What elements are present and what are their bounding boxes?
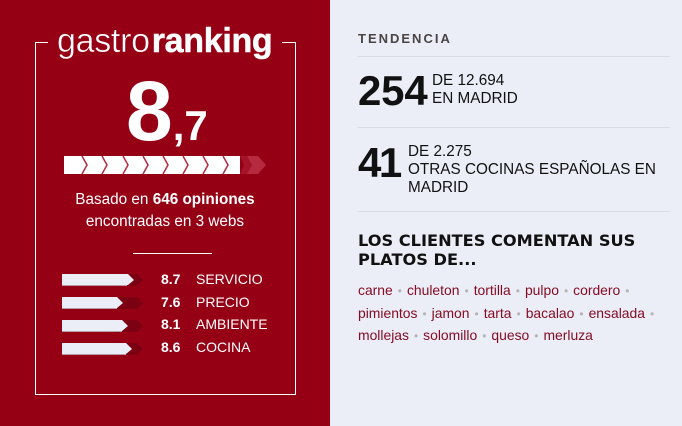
score chevron bar	[64, 156, 266, 174]
dish list	[358, 282, 654, 343]
score row: precio	[62, 294, 250, 310]
bar: precio	[62, 297, 143, 309]
value: servicio: 8.7	[161, 271, 180, 287]
number: 41: 41	[358, 139, 400, 186]
label: precio: PRECIO	[196, 294, 250, 310]
heading: customer comments	[358, 231, 635, 269]
reviews summary: Basado en 646 opiniones	[75, 191, 255, 208]
heading: tendencia: TENDENCIA	[358, 31, 452, 46]
label: cocina: COCINA	[196, 339, 250, 355]
bar: cocina	[62, 343, 143, 355]
bar: servicio	[62, 274, 143, 286]
label: servicio: SERVICIO	[196, 271, 263, 287]
text: spanish cuisine rank	[408, 143, 656, 196]
panel: rating	[0, 0, 330, 426]
dish list: pimientos • jamon • tarta • bacalao • ensalada •	[358, 304, 654, 320]
stat: spanish cuisine rank	[358, 139, 656, 196]
text: madrid rank: EN MADRID	[432, 90, 518, 107]
value: cocina: 8.6	[161, 339, 180, 355]
rating frame	[35, 42, 296, 395]
reviews summary	[75, 191, 255, 230]
text: madrid rank	[432, 72, 518, 107]
logo: gastroranking	[57, 22, 272, 60]
text: spanish cuisine rank: MADRID	[408, 179, 468, 196]
heading: customer comments: LOS CLIENTES COMENTAN SUS	[358, 231, 635, 250]
bar: ambiente	[62, 320, 143, 332]
label: ambiente: AMBIENTE	[196, 316, 268, 332]
text: spanish cuisine rank: DE 2.275	[408, 143, 472, 160]
overall score: 8,7	[126, 64, 208, 158]
reviews summary: encontradas en 3 webs	[86, 213, 244, 230]
text: madrid rank: DE 12.694	[432, 72, 504, 89]
text: spanish cuisine rank: OTRAS COCINAS ESPAÑOLAS EN	[408, 161, 656, 178]
dish list: carne • chuleton • tortilla • pulpo • cordero •	[358, 282, 629, 298]
score row: servicio	[62, 271, 263, 287]
stat: madrid rank	[358, 67, 518, 114]
value: ambiente: 8.1	[161, 316, 180, 332]
heading: customer comments: PLATOS DE...	[358, 250, 476, 269]
value: precio: 7.6	[161, 294, 180, 310]
number: 254: 254	[358, 67, 427, 114]
dish list: mollejas • solomillo • queso • merluza	[358, 327, 593, 343]
score row: ambiente	[62, 316, 268, 332]
divider	[133, 253, 212, 254]
score row: cocina	[62, 339, 250, 355]
